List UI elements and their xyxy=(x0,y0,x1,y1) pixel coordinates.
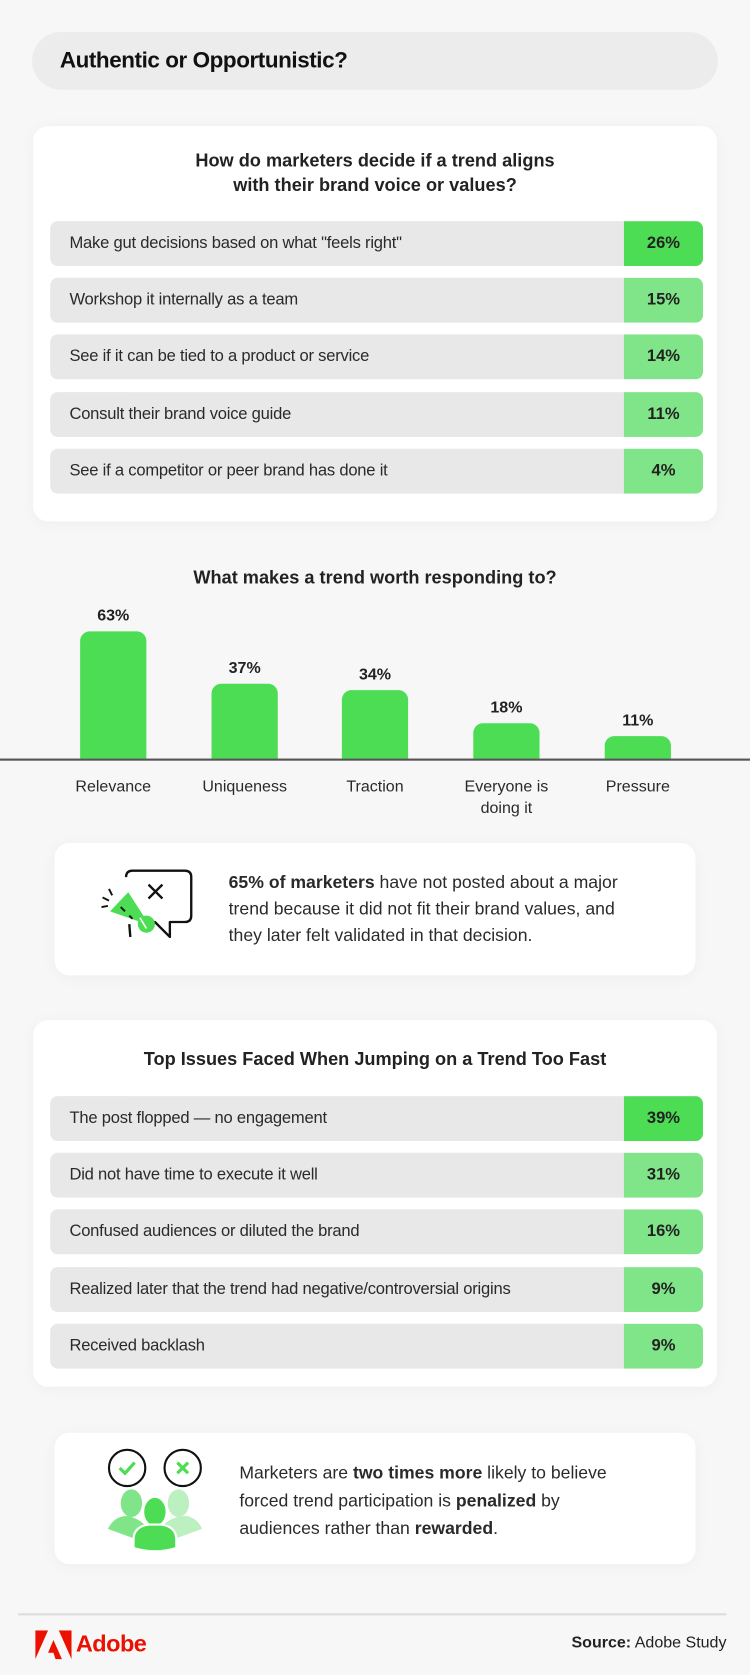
row 5: Received backlash xyxy=(69,1337,205,1355)
row 5 xyxy=(50,449,703,494)
bar chart: Uniqueness xyxy=(202,778,287,796)
row 1 xyxy=(50,221,703,266)
bar chart xyxy=(0,607,750,817)
row 3 xyxy=(50,334,703,379)
row 2: Did not have time to execute it well xyxy=(69,1166,318,1184)
panel: top issues xyxy=(33,1020,717,1387)
callout: two times more xyxy=(54,1433,696,1564)
heading xyxy=(195,151,555,196)
row 1: 26% xyxy=(647,234,680,252)
bar chart: doing it xyxy=(481,799,532,817)
title pill xyxy=(32,32,718,90)
row 5: 4% xyxy=(651,462,675,480)
heading: Top Issues Faced When Jumping on a Trend Too Fast xyxy=(144,1049,606,1069)
bar chart: Everyone is xyxy=(465,778,548,796)
source: Source: Adobe Study xyxy=(571,1634,726,1652)
callout text: 65% of marketers have not posted about a major trend because it did not fit their brand values, and they later felt validated in that decision. xyxy=(229,873,618,946)
row 1: The post flopped — no engagement xyxy=(69,1109,327,1127)
row 3: See if it can be tied to a product or service xyxy=(69,347,369,365)
row 2: Workshop it internally as a team xyxy=(69,291,298,309)
row 3: 14% xyxy=(647,347,680,365)
row 2 xyxy=(50,1153,703,1198)
logo: Adobe xyxy=(35,1630,146,1660)
row 3: Confused audiences or diluted the brand xyxy=(69,1222,359,1240)
row 5: See if a competitor or peer brand has done it xyxy=(69,462,388,480)
bar chart: 11% xyxy=(622,712,653,730)
row 3: 16% xyxy=(647,1222,680,1240)
bar chart: Relevance xyxy=(75,778,151,796)
row 2 xyxy=(50,278,703,323)
icon: people with check and cross xyxy=(108,1448,202,1550)
bar chart: Traction xyxy=(346,778,404,796)
row 4 xyxy=(50,1267,703,1312)
bar chart: Pressure xyxy=(606,778,670,796)
row 4: Consult their brand voice guide xyxy=(69,405,291,423)
row 3 xyxy=(50,1209,703,1254)
row 1: Make gut decisions based on what "feels right" xyxy=(69,234,402,252)
icon: megaphone with speech bubble xyxy=(101,870,192,938)
bar chart: 18% xyxy=(490,699,522,717)
callout: 65% of marketers xyxy=(54,843,696,975)
row 1 xyxy=(50,1096,703,1141)
row 4: Realized later that the trend had negative/controversial origins xyxy=(69,1280,511,1298)
row 5 xyxy=(50,1324,703,1369)
heading: with their brand voice or values? xyxy=(233,175,517,196)
callout text: Marketers are two times more likely to believe forced trend participation is penalized by audiences rather than rewarded. xyxy=(239,1464,607,1538)
bar chart: 63% xyxy=(97,607,129,625)
logo: Adobe: Adobe xyxy=(76,1630,146,1657)
row 5: 9% xyxy=(651,1337,675,1355)
title text: Authentic or Opportunistic? xyxy=(60,48,347,73)
row 1: 39% xyxy=(647,1109,680,1127)
row 4: 9% xyxy=(651,1280,675,1298)
bar chart: 37% xyxy=(229,659,261,677)
row 2: 31% xyxy=(647,1166,680,1184)
panel: brand alignment xyxy=(33,126,717,521)
row 4 xyxy=(50,392,703,437)
row 2: 15% xyxy=(647,291,680,309)
heading: How do marketers decide if a trend aligns xyxy=(195,151,555,171)
row 4: 11% xyxy=(647,405,680,423)
bar chart: 34% xyxy=(359,666,391,684)
heading: bar chart: What makes a trend worth responding to? xyxy=(193,567,557,588)
